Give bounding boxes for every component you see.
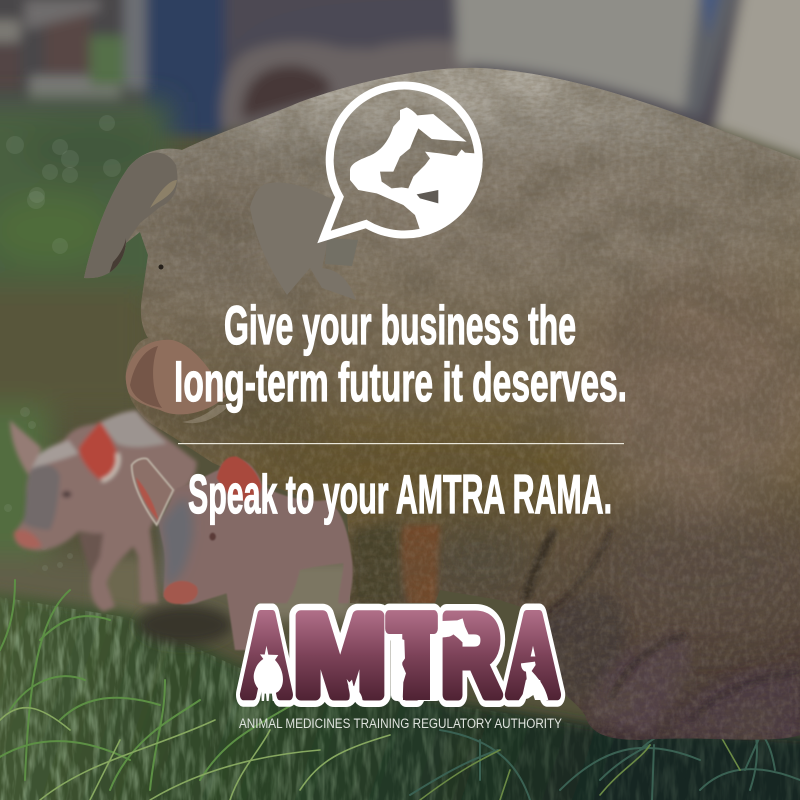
logo wordmark fill: R	[441, 592, 501, 720]
shading on the sow	[140, 79, 800, 630]
AMTRA logo	[242, 592, 560, 720]
bubble outline	[324, 86, 479, 237]
big sow	[80, 60, 800, 750]
near ear of sow	[250, 182, 356, 300]
logo wordmark outline: M	[294, 592, 386, 720]
icon: sheep	[254, 654, 283, 701]
icon: cat	[347, 679, 363, 702]
left piglet far ear	[10, 420, 42, 475]
far ear of sow	[84, 153, 177, 278]
logo strapline: ANIMAL MEDICINES TRAINING REGULATORY AUTHORITY	[239, 716, 562, 731]
logo animal silhouettes	[254, 618, 548, 702]
left piglet near ear	[79, 422, 120, 480]
ground behind piglets	[255, 560, 355, 620]
sow eye	[158, 264, 164, 270]
logo wordmark fill: A	[506, 592, 560, 720]
right piglet near ear	[217, 456, 262, 502]
right piglet far ear	[132, 458, 173, 525]
logo wordmark fill: T	[388, 592, 435, 720]
grass	[0, 580, 800, 800]
logo wordmark fill: A	[242, 592, 292, 720]
sow fur texture	[138, 68, 800, 572]
speech bubble logo	[324, 86, 483, 237]
logo wordmark outline: A	[506, 592, 560, 720]
piglet right	[132, 456, 353, 650]
headline	[174, 294, 627, 413]
icon: dog	[518, 662, 548, 701]
blurred farm background	[0, 0, 800, 165]
logo wordmark outline: T	[388, 592, 435, 720]
foliage bokeh	[4, 115, 121, 571]
logo wordmark fill	[242, 592, 560, 720]
sow muddy foreleg	[350, 520, 402, 605]
snout	[125, 340, 226, 414]
logo wordmark outline	[242, 592, 560, 720]
icon: cow leg	[396, 638, 406, 702]
icon: cow, horse and dog silhouettes	[350, 107, 483, 230]
icon: horse	[442, 618, 472, 646]
piglet left (blurred)	[10, 410, 197, 612]
logo wordmark outline: R	[441, 592, 501, 720]
logo wordmark fill: M	[294, 592, 386, 720]
blurred foliage	[0, 102, 270, 635]
logo wordmark outline: A	[242, 592, 292, 720]
